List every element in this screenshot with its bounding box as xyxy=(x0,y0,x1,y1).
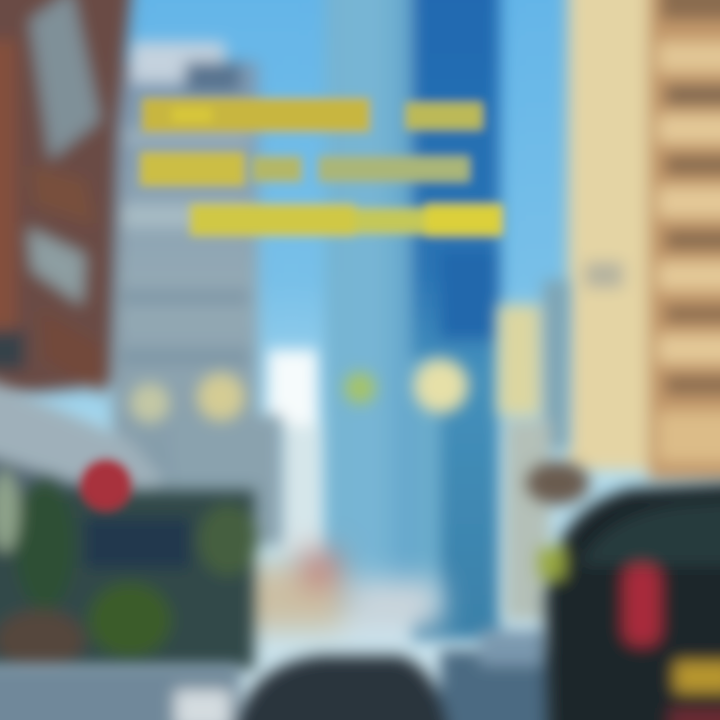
distant glow between towers xyxy=(268,350,324,555)
cars and road bottom xyxy=(0,630,560,720)
row of pale yellow circles xyxy=(130,359,468,423)
street mid distance xyxy=(225,550,440,630)
red circular sign xyxy=(80,459,132,511)
headline: illegible yellow text block xyxy=(140,98,503,236)
mid-left grey tower xyxy=(112,42,282,545)
right cream building xyxy=(568,0,720,480)
trees bottom left xyxy=(0,468,258,670)
dark car bottom right xyxy=(538,482,720,720)
center glass tower xyxy=(325,0,500,640)
left brick building xyxy=(0,0,134,400)
left awning xyxy=(0,372,165,520)
small sign above car xyxy=(526,461,590,505)
distant pale buildings xyxy=(498,280,569,620)
